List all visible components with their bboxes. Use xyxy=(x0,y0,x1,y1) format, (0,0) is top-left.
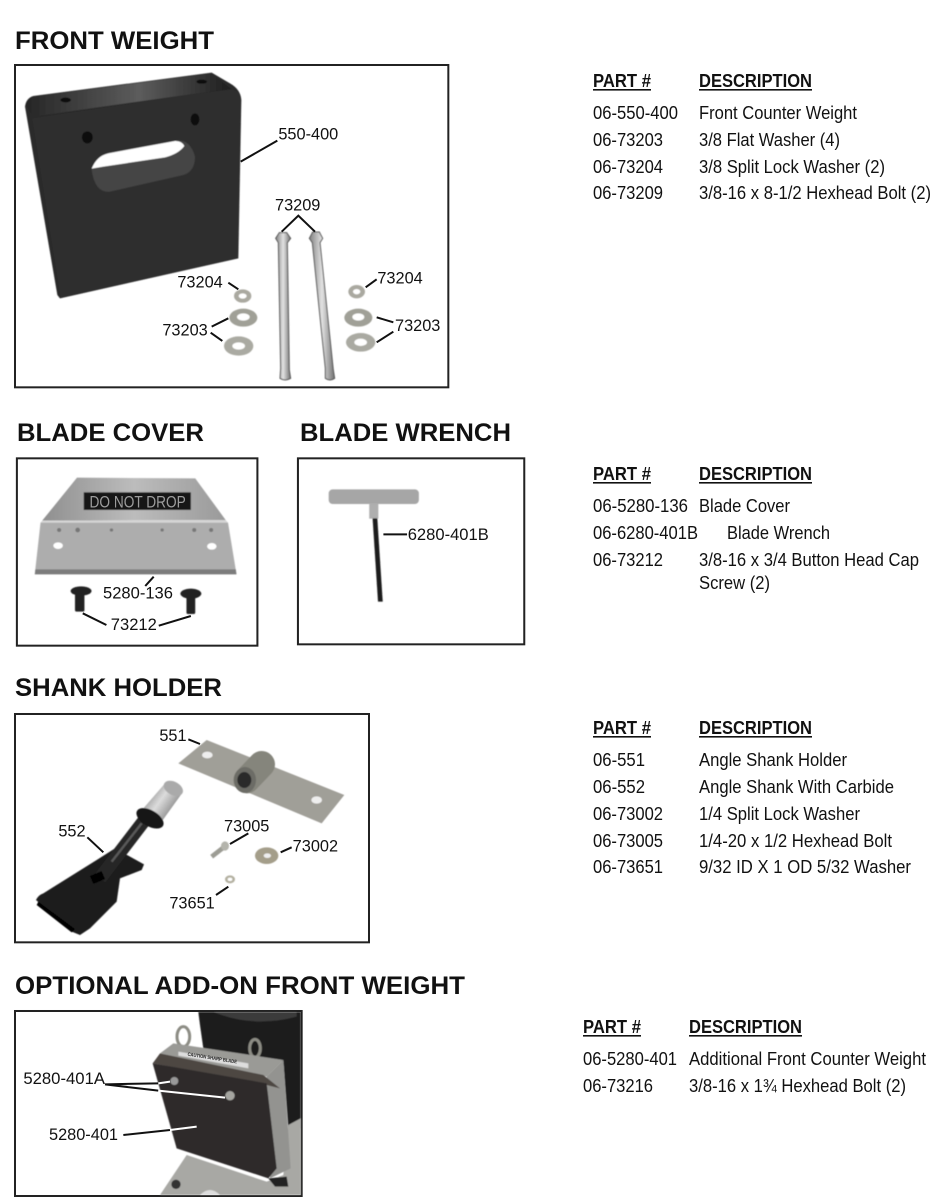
callout labels: 73209 xyxy=(275,197,320,215)
parts table: optional add-on weight: 3/8-16 x 1¾ Hexhead Bolt (2) xyxy=(689,1075,906,1096)
parts table: front weight xyxy=(593,70,931,203)
parts table: shank holder: 9/32 ID X 1 OD 5/32 Washer xyxy=(699,856,911,877)
callout labels: 73204 xyxy=(177,273,223,291)
icon: hexhead bolts xyxy=(276,232,335,380)
icon: front counter weight block xyxy=(25,73,241,298)
panel: blade cover diagram xyxy=(17,458,257,646)
panel: blade wrench diagram xyxy=(298,458,524,644)
parts table: blade cover and wrench: Blade Cover xyxy=(699,495,790,516)
parts table: optional add-on weight xyxy=(583,1016,926,1096)
callout labels: 73651 xyxy=(169,894,215,912)
parts table: front weight: 06-550-400 xyxy=(593,102,678,123)
parts table: shank holder: 06-73651 xyxy=(593,856,663,877)
parts table: front weight: 06-73209 xyxy=(593,182,663,203)
plate label text: DO NOT DROP xyxy=(90,492,186,511)
warning strip text: CAUTION SHARP BLADE xyxy=(187,1052,238,1066)
parts table: front weight: 06-73203 xyxy=(593,129,663,150)
leader lines xyxy=(83,577,191,626)
parts table: shank holder: PART # xyxy=(593,717,651,738)
callout labels: 5280-136 xyxy=(103,584,173,602)
leader lines xyxy=(105,1083,170,1135)
parts table: front weight: 3/8 Flat Washer (4) xyxy=(699,129,840,150)
panel: optional add-on front weight diagram xyxy=(15,1011,302,1196)
parts table: shank holder: Angle Shank With Carbide xyxy=(699,776,894,797)
callout labels: 550-400 xyxy=(278,125,338,143)
icon: angle shank with carbide xyxy=(36,778,186,935)
parts table: front weight: DESCRIPTION xyxy=(699,70,812,91)
leader lines xyxy=(211,141,393,342)
parts table: shank holder xyxy=(593,717,911,877)
title: front weight: FRONT WEIGHT xyxy=(15,27,214,55)
title: blade wrench: BLADE WRENCH xyxy=(300,419,511,447)
parts table: shank holder: 06-73002 xyxy=(593,803,663,824)
parts table: front weight: 3/8 Split Lock Washer (2) xyxy=(699,156,885,177)
title: blade cover: BLADE COVER xyxy=(17,419,204,447)
icon: button head screws xyxy=(71,586,201,614)
callout labels: 5280-401 xyxy=(49,1126,118,1144)
leader line xyxy=(383,531,407,537)
parts table: front weight: 06-73204 xyxy=(593,156,663,177)
title: shank holder: SHANK HOLDER xyxy=(15,674,222,702)
parts table: front weight: PART # xyxy=(593,70,651,91)
icon: T-handle wrench xyxy=(329,489,419,602)
parts table: shank holder: DESCRIPTION xyxy=(699,717,812,738)
icon: small hardware xyxy=(212,841,278,883)
parts table: blade cover and wrench: Screw (2) xyxy=(699,572,770,593)
panel: front weight diagram xyxy=(15,65,448,387)
callout labels xyxy=(23,1070,118,1144)
callout label: 6280-401B xyxy=(408,526,489,544)
parts table: blade cover and wrench: DESCRIPTION xyxy=(699,463,812,484)
callout labels: 73005 xyxy=(224,818,269,836)
parts table: blade cover and wrench: Blade Wrench xyxy=(727,522,830,543)
callout labels xyxy=(103,584,173,634)
leader lines over dark part xyxy=(158,1082,225,1130)
parts table: shank holder: Angle Shank Holder xyxy=(699,749,847,770)
callout labels: 551 xyxy=(159,727,187,745)
leader lines xyxy=(87,739,292,895)
icon: machine with add-on weight xyxy=(153,1012,301,1195)
callout labels: 73203 xyxy=(395,317,440,335)
icon: washers xyxy=(224,285,375,356)
title: optional add-on front weight: OPTIONAL ADD-ON FRONT WEIGHT xyxy=(15,972,465,1000)
parts table: blade cover and wrench: 3/8-16 x 3/4 Button Head Cap xyxy=(699,549,919,570)
callout labels: 552 xyxy=(58,823,86,841)
icon: blade cover plate xyxy=(35,478,236,574)
parts table: blade cover and wrench: 06-5280-136 xyxy=(593,495,688,516)
parts table: blade cover and wrench: 06-73212 xyxy=(593,549,663,570)
callout labels: 73002 xyxy=(293,838,338,856)
icon: angle shank holder plate xyxy=(178,740,344,823)
parts table: shank holder: 06-73005 xyxy=(593,830,663,851)
parts table: front weight: Front Counter Weight xyxy=(699,102,857,123)
parts table: optional add-on weight: PART # xyxy=(583,1016,641,1037)
callout labels: 73203 xyxy=(162,322,208,340)
panel: shank holder diagram xyxy=(15,714,369,942)
parts table: blade cover and wrench: PART # xyxy=(593,463,651,484)
callout labels xyxy=(58,727,338,912)
parts table: shank holder: 1/4 Split Lock Washer xyxy=(699,803,860,824)
parts table: shank holder: 06-552 xyxy=(593,776,645,797)
parts table: optional add-on weight: DESCRIPTION xyxy=(689,1016,802,1037)
callout labels: 5280-401A xyxy=(23,1070,105,1088)
callout labels xyxy=(162,125,440,340)
parts table: optional add-on weight: 06-5280-401 xyxy=(583,1048,677,1069)
parts table: shank holder: 06-551 xyxy=(593,749,645,770)
parts table: blade cover and wrench: 06-6280-401B xyxy=(593,522,698,543)
parts table: shank holder: 1/4-20 x 1/2 Hexhead Bolt xyxy=(699,830,892,851)
callout labels: 73204 xyxy=(377,269,423,287)
parts table: optional add-on weight: 06-73216 xyxy=(583,1075,653,1096)
callout labels: 73212 xyxy=(111,616,157,634)
parts table: blade cover and wrench xyxy=(593,463,919,593)
